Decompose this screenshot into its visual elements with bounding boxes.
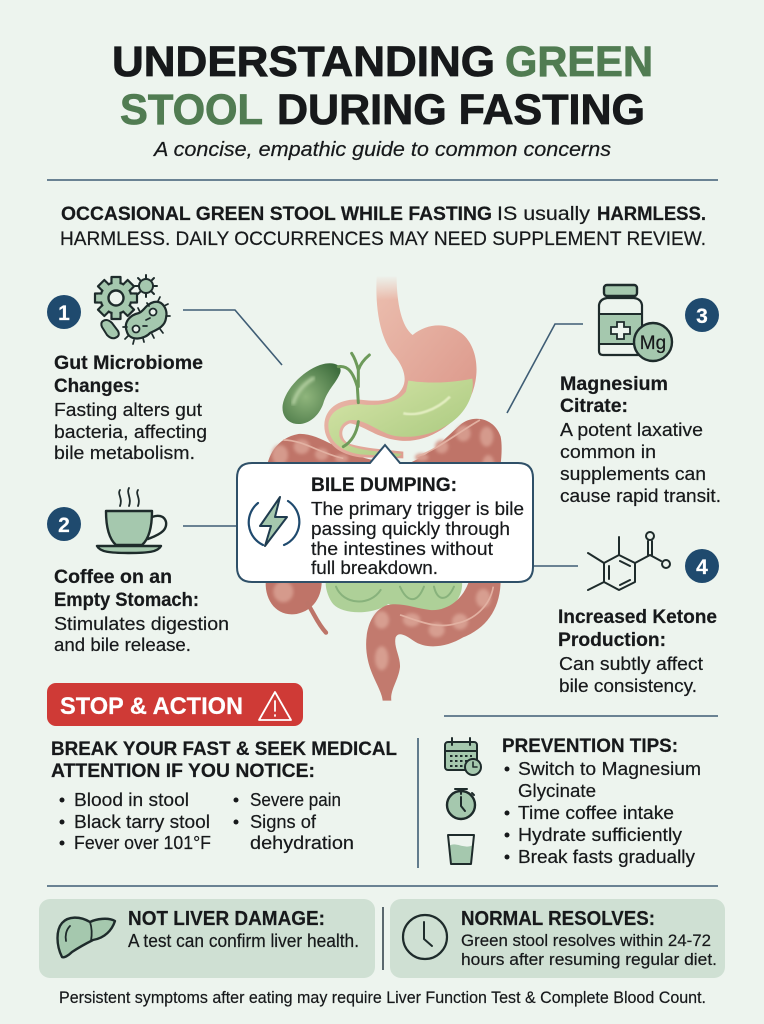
- panel: cause 3 magnesium citrate: [560, 285, 721, 506]
- panel: warning signs: ATTENTION IF YOU NOTICE:: [51, 761, 315, 782]
- key statement: OCCASIONAL GREEN STOOL WHILE FASTING: [61, 204, 492, 225]
- footer note: Persistent symptoms after eating may require Liver Function Test & Complete Blood Count.: [59, 988, 706, 1007]
- stop and action banner: [47, 683, 303, 726]
- key statement: HARMLESS. DAILY OCCURRENCES MAY NEED SUPPLEMENT REVIEW.: [60, 229, 706, 250]
- panel: not liver damage: NOT LIVER DAMAGE:: [128, 908, 325, 930]
- icon: supplement bottle: Mg: [640, 333, 666, 354]
- panel: prevention tips: Break fasts gradually: [518, 847, 695, 867]
- panel: cause 3 magnesium citrate: 3: [696, 305, 708, 328]
- title: UNDERSTANDING: [112, 38, 495, 86]
- bullet list: left: Black tarry stool: [74, 812, 210, 832]
- panel: normal resolves: NORMAL RESOLVES:: [461, 908, 655, 930]
- panel: bile dumping callout: the intestines without: [311, 539, 493, 559]
- panel: cause 1 gut microbiome: 1: [58, 302, 70, 325]
- bullet list: right: [234, 790, 354, 853]
- descending and sigmoid colon: [366, 580, 501, 701]
- icon: liver: [58, 918, 115, 957]
- panel: cause 2 coffee: Stimulates digestion: [54, 614, 229, 634]
- panel: cause 1 gut microbiome: Fasting alters gut: [54, 400, 202, 420]
- panel: cause 1 gut microbiome: bile metabolism.: [54, 443, 195, 463]
- icon: supplement bottle: [599, 285, 672, 361]
- icon: gear and bacteria: [95, 275, 170, 344]
- panel: bile dumping callout: The primary trigger is bile: [311, 499, 524, 519]
- bullet list: right: Signs of: [250, 812, 317, 832]
- panel: cause 2 coffee: 2: [58, 514, 70, 537]
- icon: glass of water: [448, 835, 474, 864]
- panel: cause 3 magnesium citrate: A potent laxative: [560, 420, 703, 440]
- gallbladder and bile duct: [282, 353, 369, 447]
- panel: bile dumping callout: passing quickly through: [311, 519, 510, 539]
- panel: cause 1 gut microbiome: Changes:: [54, 376, 140, 397]
- icon: clock: [403, 915, 447, 959]
- panel: cause 4 ketones: [558, 532, 719, 696]
- key statement: [60, 204, 706, 250]
- panel: cause 2 coffee: [47, 488, 229, 655]
- panel: cause 1 gut microbiome: bacteria, affecting: [54, 422, 207, 442]
- panel: cause 3 magnesium citrate: Magnesium: [560, 374, 668, 395]
- stop and action banner: STOP & ACTION: [60, 693, 243, 720]
- panel: cause 4 ketones: bile consistency.: [559, 676, 697, 696]
- panel: prevention tips: Time coffee intake: [518, 803, 674, 823]
- panel: normal resolves: hours after resuming regular diet.: [461, 950, 717, 969]
- panel: cause 4 ketones: 4: [696, 556, 708, 579]
- digestive system illustration: [266, 275, 502, 701]
- panel: cause 3 magnesium citrate: cause rapid transit.: [560, 486, 721, 506]
- key statement: HARMLESS.: [597, 204, 706, 225]
- panel: cause 3 magnesium citrate: Citrate:: [560, 396, 628, 417]
- panel: cause 1 gut microbiome: Gut Microbiome: [54, 353, 203, 374]
- panel: warning signs: [51, 739, 397, 853]
- icon: ketone molecule: [588, 532, 670, 590]
- lower left cecum and appendix: [266, 578, 326, 633]
- small intestine loops: [326, 578, 462, 612]
- panel: cause 4 ketones: Production:: [558, 630, 666, 651]
- icon: coffee cup: [97, 488, 166, 553]
- panel: cause 3 magnesium citrate: common in: [560, 442, 656, 462]
- panel: prevention tips: Glycinate: [518, 781, 596, 801]
- panel: cause 4 ketones: Can subtly affect: [559, 654, 703, 674]
- icon: lightning bolt: [249, 497, 299, 546]
- bullet list: left: [60, 790, 211, 853]
- icon: calendar: [445, 738, 481, 775]
- panel: cause 2 coffee: and bile release.: [54, 635, 191, 655]
- bullet list: left: Blood in stool: [74, 790, 189, 810]
- leader lines: [183, 310, 583, 566]
- large intestine upper: [266, 419, 502, 483]
- bullet list: left: Fever over 101°F: [74, 833, 211, 853]
- panel: normal resolves: Green stool resolves within 24-72: [461, 931, 711, 950]
- panel: not liver damage: [39, 899, 375, 978]
- bullet list: right: Severe pain: [250, 790, 341, 810]
- panel: cause 4 ketones: Increased Ketone: [558, 607, 717, 628]
- panel: not liver damage: A test can confirm liver health.: [128, 931, 359, 951]
- panel: prevention tips: PREVENTION TIPS:: [502, 736, 678, 757]
- title: STOOL: [120, 86, 263, 134]
- icon: stopwatch: [447, 789, 475, 819]
- icon: warning triangle: [259, 692, 291, 720]
- panel: cause 2 coffee: Coffee on an: [54, 567, 172, 588]
- panel: prevention tips: Hydrate sufficiently: [518, 825, 682, 845]
- title: DURING FASTING: [277, 86, 645, 134]
- subtitle: A concise, empathic guide to common concerns: [153, 139, 611, 161]
- panel: normal resolves: [390, 899, 725, 978]
- panel: bile dumping callout: full breakdown.: [311, 558, 438, 578]
- panel: warning signs: BREAK YOUR FAST & SEEK MEDICAL: [51, 739, 397, 760]
- title: [112, 38, 653, 134]
- panel: bile dumping callout: [237, 445, 533, 582]
- panel: prevention tips: Switch to Magnesium: [518, 759, 701, 779]
- panel: cause 2 coffee: Empty Stomach:: [54, 590, 199, 611]
- title: GREEN: [505, 38, 653, 86]
- panel: cause 1 gut microbiome: [47, 275, 207, 463]
- panel: cause 3 magnesium citrate: supplements can: [560, 464, 706, 484]
- bullet list: right: dehydration: [250, 833, 354, 853]
- key statement: IS usually: [497, 204, 591, 225]
- stomach and esophagus: [324, 275, 477, 458]
- panel: prevention tips: [445, 736, 701, 867]
- panel: bile dumping callout: BILE DUMPING:: [311, 475, 457, 496]
